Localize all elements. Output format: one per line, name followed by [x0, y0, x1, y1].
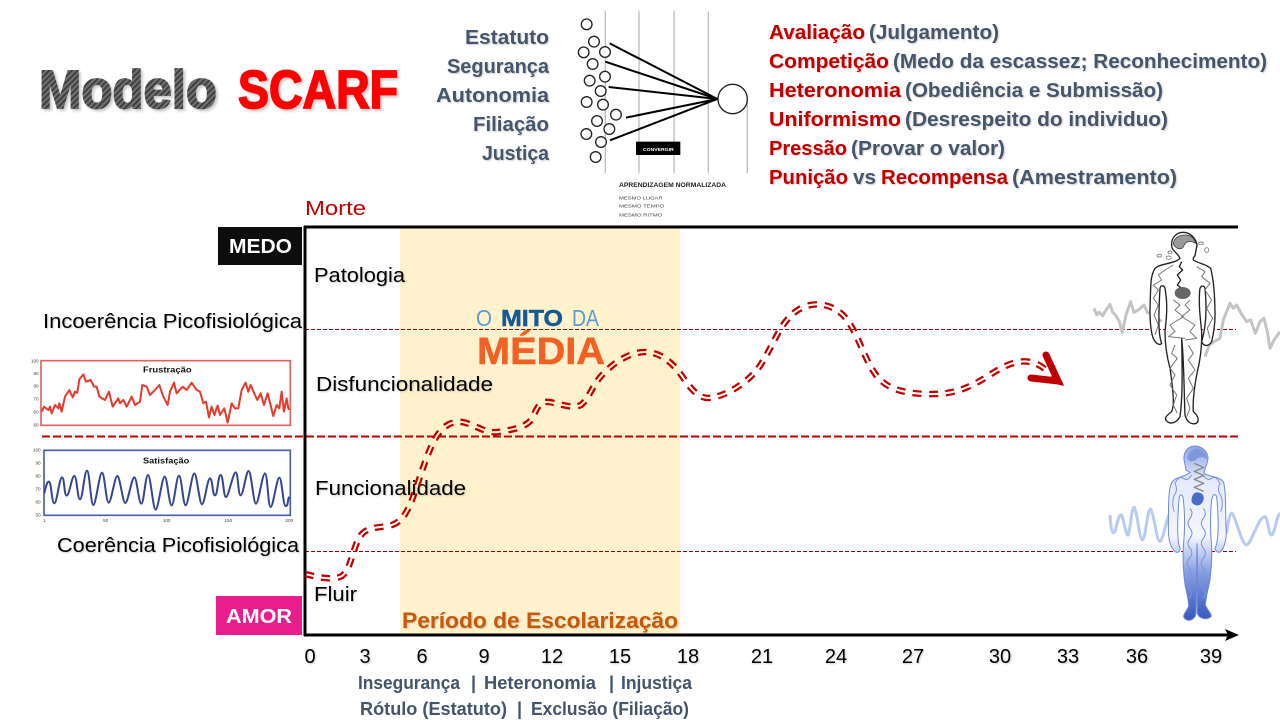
state labels: Coerência Picofisiológica — [57, 535, 300, 557]
chart axes — [304, 226, 1239, 641]
school harms caption: | — [471, 673, 476, 693]
chart: Frustração — [31, 358, 290, 428]
label: Morte: Morte — [305, 198, 366, 220]
school harms caption: Injustiça — [621, 673, 693, 693]
badge: MEDO: MEDO — [229, 236, 292, 258]
normalized learning diagram: MESMO RITMO — [619, 212, 662, 218]
age axis labels: 27 — [902, 646, 924, 668]
list of school practices: (Provar o valor) — [851, 138, 1005, 160]
SCARF domains list: Filiação — [473, 114, 549, 136]
badge: AMOR — [216, 596, 302, 635]
SCARF domains list: Segurança — [447, 56, 550, 78]
state labels: Patologia — [314, 265, 406, 287]
chart: Satisfação: 50 — [103, 518, 109, 523]
age axis labels: 33 — [1057, 646, 1079, 668]
school harms caption: Rótulo (Estatuto) — [360, 699, 507, 719]
figure: coherent body — [1110, 446, 1280, 620]
list of school practices: (Desrespeito do individuo) — [905, 109, 1168, 131]
SCARF domains list: Estatuto — [465, 27, 549, 49]
list of school practices: vs — [853, 167, 876, 189]
chart: Satisfação: 50 — [35, 513, 41, 518]
chart: Frustração: 50 — [33, 423, 39, 428]
school harms caption: Insegurança — [358, 673, 461, 693]
badge: AMOR: AMOR — [226, 606, 293, 628]
normalized learning diagram — [578, 11, 747, 218]
title — [39, 60, 398, 120]
title: SCARF — [238, 60, 398, 120]
age axis labels: 24 — [825, 646, 847, 668]
school harms caption: | — [609, 673, 614, 693]
chart: Satisfação: 60 — [35, 500, 41, 505]
list of school practices: (Amestramento) — [1012, 167, 1177, 189]
list of school practices: Competição — [769, 51, 889, 73]
chart: Frustração: 60 — [33, 410, 39, 415]
chart: Satisfação: 100 — [33, 448, 41, 453]
school harms caption: Heteronomia — [484, 673, 597, 693]
chart: Frustração: 70 — [33, 397, 39, 402]
age axis labels: 3 — [359, 646, 371, 668]
development curve with arrow — [305, 304, 1064, 578]
state labels: Incoerência Picofisiológica — [43, 311, 303, 333]
list of school practices — [769, 22, 1267, 189]
chart: Frustração: 100 — [31, 358, 39, 363]
state labels: Disfuncionalidade — [316, 374, 493, 396]
band label: Período de Escolarização: Período de Escolarização — [402, 608, 678, 633]
chart: Satisfação: 200 — [285, 518, 294, 523]
chart: Frustração: 90 — [33, 371, 39, 376]
normalized learning diagram: MESMO LUGAR — [619, 195, 663, 201]
logo: O mito da média: DA — [572, 305, 600, 331]
chart: Satisfação — [33, 448, 294, 523]
chart: Frustração: 80 — [33, 384, 39, 389]
chart: Satisfação: 70 — [35, 487, 41, 492]
state labels: Fluir — [314, 584, 357, 606]
age axis labels: 36 — [1126, 646, 1148, 668]
schooling period band — [400, 228, 680, 634]
state labels — [43, 265, 493, 606]
chart: Satisfação: 100 — [163, 518, 171, 523]
logo: O mito da média — [476, 305, 605, 373]
age axis labels: 30 — [989, 646, 1011, 668]
figure: incoherent body — [1094, 232, 1280, 424]
normalized learning diagram: CONVERGIR — [643, 147, 674, 152]
title: Modelo — [39, 60, 217, 120]
age axis labels: 6 — [416, 646, 428, 668]
age axis labels: 18 — [677, 646, 699, 668]
list of school practices: (Obediência e Submissão) — [905, 80, 1163, 102]
chart: Satisfação: 150 — [224, 518, 233, 523]
age axis labels: 39 — [1200, 646, 1222, 668]
list of school practices: Pressão — [769, 138, 847, 160]
normalized learning diagram: APRENDIZAGEM NORMALIZADA — [619, 183, 727, 189]
list of school practices: (Medo da escassez; Reconhecimento) — [893, 51, 1267, 73]
normalized learning diagram: MESMO TEMPO — [619, 204, 664, 210]
chart: Satisfação: 90 — [35, 461, 41, 466]
age axis labels: 21 — [751, 646, 773, 668]
age axis labels: 12 — [541, 646, 563, 668]
list of school practices: Recompensa — [881, 167, 1009, 189]
state labels: Funcionalidade — [315, 478, 466, 500]
SCARF domains list: Justiça — [482, 143, 550, 165]
reference lines — [42, 330, 1238, 552]
chart: Satisfação: 1 — [43, 518, 46, 523]
logo: O mito da média: MÉDIA — [477, 329, 605, 373]
chart: Satisfação: 80 — [35, 474, 41, 479]
SCARF domains list: Autonomia — [436, 85, 550, 107]
school harms caption — [358, 673, 693, 719]
list of school practices: Avaliação — [769, 22, 865, 44]
SCARF domains list — [436, 27, 550, 165]
list of school practices: Punição — [769, 167, 848, 189]
logo: O mito da média: MITO — [501, 305, 563, 331]
age axis labels: 15 — [609, 646, 631, 668]
list of school practices: Uniformismo — [769, 109, 901, 131]
age axis labels: 9 — [478, 646, 490, 668]
chart: Satisfação: Satisfação — [143, 457, 189, 466]
age axis labels: 0 — [304, 646, 316, 668]
logo: O mito da média: O — [476, 305, 492, 331]
age axis labels — [304, 646, 1222, 668]
list of school practices: (Julgamento) — [869, 22, 999, 44]
school harms caption: Exclusão (Filiação) — [531, 699, 689, 719]
badge: MEDO — [218, 227, 302, 265]
school harms caption: | — [517, 699, 522, 719]
chart: Frustração: Frustração — [143, 366, 192, 375]
list of school practices: Heteronomia — [769, 80, 902, 102]
